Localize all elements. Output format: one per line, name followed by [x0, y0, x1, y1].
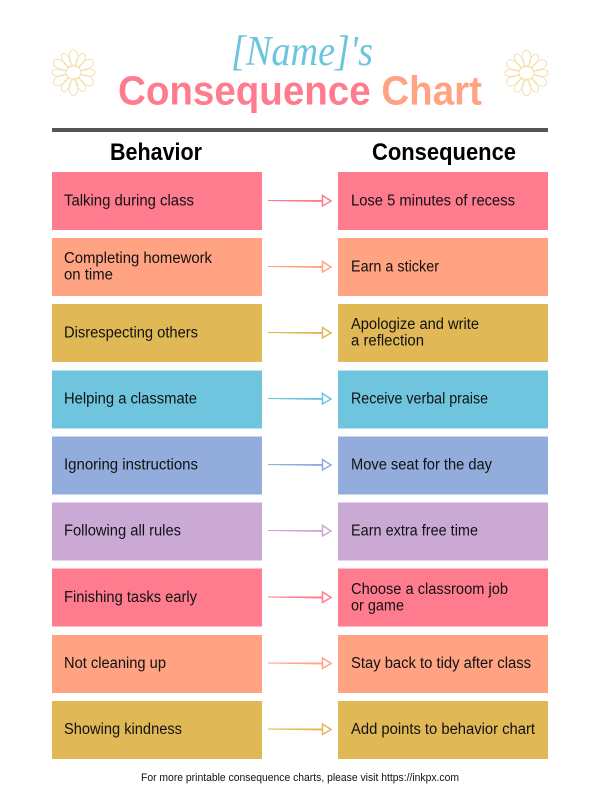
row 7: Choose a classroom job — [351, 581, 508, 598]
footer note: For more printable consequence charts, please visit https://inkpx.com — [141, 772, 459, 784]
row 9 — [52, 701, 548, 759]
row 6 — [52, 502, 548, 560]
row 4 — [52, 370, 548, 428]
row 2 — [52, 238, 548, 296]
row 5: Move seat for the day — [351, 456, 492, 474]
title: consequence chart: Consequence Chart — [118, 68, 482, 114]
row 8 — [52, 635, 548, 693]
row 2: on time — [64, 266, 113, 284]
row 6: Following all rules — [64, 522, 181, 540]
row 4: Receive verbal praise — [351, 390, 488, 408]
row 3 — [52, 304, 548, 362]
row 3: Apologize and write — [351, 316, 479, 333]
row 1 — [52, 172, 548, 230]
row 7: Finishing tasks early — [64, 589, 197, 606]
row 5 — [52, 436, 548, 494]
row 5: Ignoring instructions — [64, 456, 198, 474]
row 2: Completing homework — [64, 250, 212, 267]
row 8: Stay back to tidy after class — [351, 655, 531, 672]
row 6: Earn extra free time — [351, 522, 478, 540]
icon: right flower — [505, 50, 548, 96]
row 7 — [52, 568, 548, 626]
row 1: Lose 5 minutes of recess — [351, 192, 515, 209]
row 9: Showing kindness — [64, 721, 182, 738]
row 7: or game — [351, 598, 404, 614]
heading: behavior: Behavior — [110, 139, 202, 166]
row 4: Helping a classmate — [64, 390, 197, 408]
row 2: Earn a sticker — [351, 258, 439, 275]
row 8: Not cleaning up — [64, 655, 166, 672]
heading: consequence: Consequence — [372, 139, 516, 166]
row 9: Add points to behavior chart — [351, 721, 536, 738]
row 3: Disrespecting others — [64, 324, 198, 341]
icon: left flower — [52, 50, 95, 95]
row 1: Talking during class — [64, 192, 194, 209]
row 3: a reflection — [351, 332, 424, 350]
title: name script: [Name]'s — [231, 29, 373, 75]
divider rule — [52, 128, 548, 132]
